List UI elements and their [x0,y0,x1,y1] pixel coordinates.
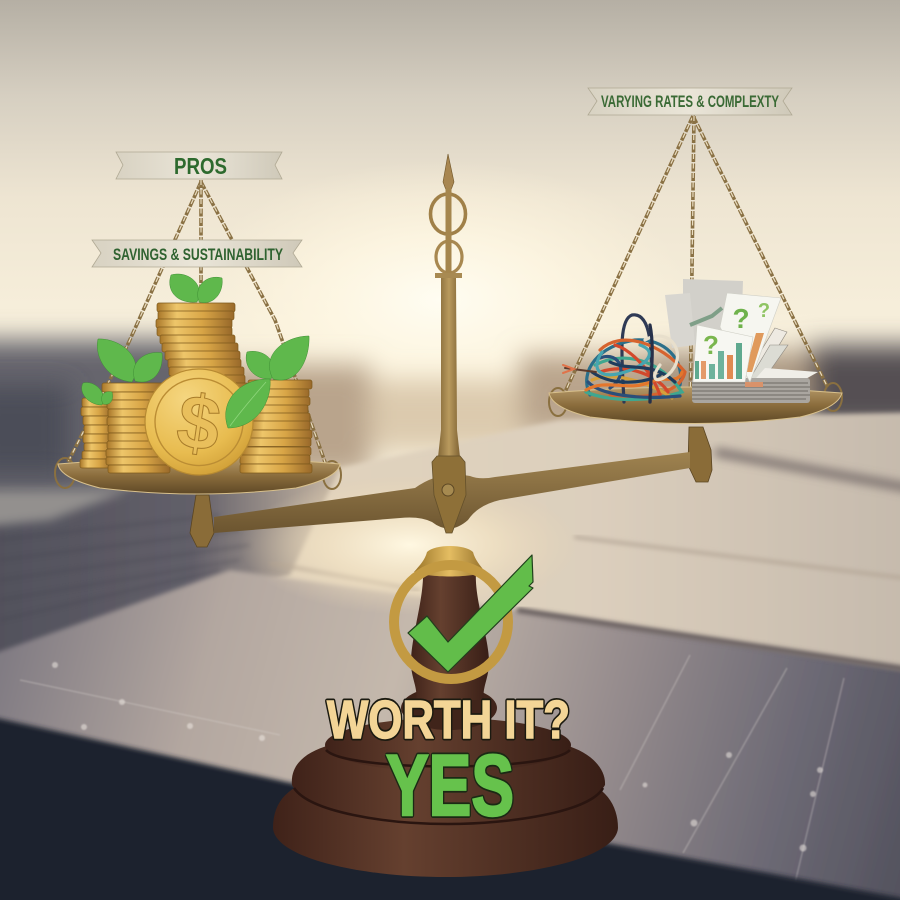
bars [695,343,742,379]
left sprout [97,339,162,382]
left coin stack [102,383,172,473]
beam [214,452,690,533]
loose sheet [750,368,818,385]
upper solar panel [230,412,900,700]
left roof stripes [0,515,250,620]
foreground dark roof edge [0,712,900,900]
left pan ring left [55,458,75,488]
turned column [411,572,489,700]
crossbar [435,273,462,278]
right coin stack [240,380,312,473]
orange bar [745,333,764,372]
right pan dish [549,387,842,424]
question page [720,293,781,382]
coin leaf [226,379,270,428]
blurred horizon [0,340,900,510]
sun glow [190,160,690,440]
left pan chains [68,180,326,465]
panel seam left [270,563,420,590]
bottom tier [273,778,618,877]
top tier [325,718,571,772]
banner: varying rates and complexity [588,88,792,115]
banner: pros: PROS [174,153,227,179]
coin stacks [80,303,312,482]
hub plate [432,456,466,533]
wooden pedestal base [273,546,618,877]
front chart page [693,325,753,382]
dollar sign: $ [172,378,226,469]
stack of papers and charts [665,279,818,403]
tangled wires [563,315,685,402]
left pan dish [58,458,340,494]
question mark: ? [703,330,719,360]
upper shaft [446,188,452,276]
green check mark [408,555,533,672]
main shaft [437,278,461,466]
spear tip [443,154,454,190]
back sheet left [665,293,695,348]
small question mark: ? [758,300,770,322]
lower ring [436,241,462,273]
top sprout [170,274,222,303]
answer: yes: YES [386,738,514,834]
middle tier [292,745,605,822]
large question mark: ? [732,303,750,334]
left roof [0,468,340,670]
panel seam [574,537,900,580]
left pan ring right [323,461,341,489]
left dark band [0,385,70,475]
heading: worth it: WORTH IT? [327,690,570,750]
paper pile [692,378,810,403]
warm glow under the beam [240,475,580,615]
tier groove upper [326,750,570,766]
main solar panel [0,570,900,900]
pivot bolt [442,484,454,496]
back chart [690,308,722,325]
banner: savings and sustainability: SAVINGS & SUSTAINABILITY [113,245,283,264]
right pan [549,383,842,424]
tier groove lower [294,788,603,824]
right sprout [246,336,309,380]
central scale post and balance beam [190,154,712,547]
banner: pros [116,152,282,179]
far panel seam [715,452,900,490]
banner: varying rates and complexity: VARYING RATES & COMPLEXTY [601,93,779,111]
gold cap [414,546,485,576]
left roof light strip [0,490,130,528]
back gray sheet [683,279,743,345]
answer: yes: YES [386,738,514,834]
banner: savings and sustainability [92,240,302,267]
coin inner rim [149,373,249,471]
upper ring [430,194,466,234]
centre coin stack [156,303,248,392]
big dollar coin [138,362,260,482]
fanned sheets second [748,345,788,382]
far left coin stack [80,398,114,468]
leaves on the coins [82,274,309,428]
right pan ring right [824,383,842,411]
panel seam dark [517,610,900,671]
fanned sheets [740,328,787,385]
left hanger bracket [190,495,214,547]
small sprout [82,383,113,405]
panel sparkle points [52,662,823,852]
collar [401,686,497,730]
right pan chains [565,116,828,420]
grid lines on the panel [20,655,844,883]
right hanger bracket [688,427,712,482]
right pan ring left [549,388,567,416]
left pan [55,458,341,494]
gold ring [394,565,508,679]
heading: worth it: WORTH IT? [327,690,570,750]
